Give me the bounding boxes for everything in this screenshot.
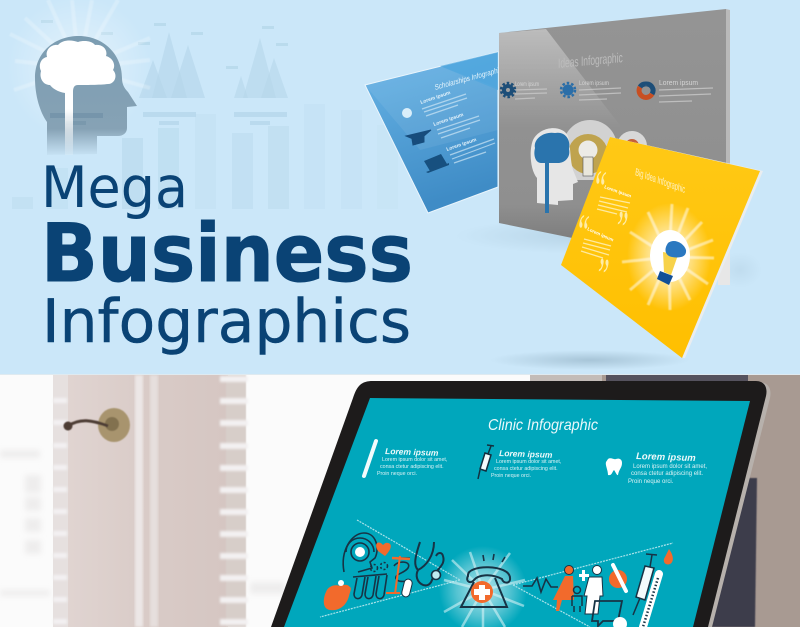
icon: glowing brain head bbox=[7, 0, 151, 155]
icon: speech bubble bbox=[592, 601, 622, 626]
clinic text: consa ctetur adipiscing elit. bbox=[380, 464, 444, 470]
laptop silver edge bbox=[362, 382, 770, 627]
icon: graduation cap bbox=[406, 130, 431, 145]
panel: big idea infographic: Lorem ipsum bbox=[587, 226, 614, 242]
icons: right medical cluster bbox=[523, 549, 673, 627]
clinic text: Lorem ipsum dolor sit amet, bbox=[496, 459, 561, 465]
clinic text: Proin neque orci. bbox=[377, 471, 417, 477]
icon: star cross bbox=[579, 570, 589, 581]
figure: woman bbox=[564, 566, 574, 574]
quote marks: “ bbox=[573, 202, 592, 262]
panel: ideas infographic: Ideas Infographic bbox=[558, 50, 623, 71]
icon: heart bbox=[376, 543, 391, 556]
title line: Business: Business bbox=[41, 207, 413, 300]
clinic text: Lorem ipsum bbox=[499, 448, 553, 460]
icon: thermometer bbox=[364, 441, 376, 476]
icon: donut chart bbox=[639, 84, 653, 97]
icon: gear blue bbox=[561, 83, 575, 97]
panel: scholarships infographic: Scholarships Infographic bbox=[434, 65, 502, 92]
icon: tooth bbox=[606, 458, 622, 475]
screen title: Clinic Infographic bbox=[488, 417, 598, 434]
icon: gear dark bbox=[501, 83, 515, 97]
clinic text: Lorem ipsum dolor sit amet, bbox=[382, 457, 447, 463]
floor shadows bbox=[455, 218, 762, 370]
icon: thermometer large bbox=[643, 574, 659, 627]
clinic text bbox=[377, 446, 707, 485]
panel: scholarships infographic: Lorem ipsum bbox=[433, 112, 465, 128]
panel: scholarships infographic: Lorem ipsum bbox=[446, 137, 478, 153]
quote marks: ” bbox=[593, 246, 612, 306]
clinic text: Lorem ipsum bbox=[385, 446, 439, 458]
panel: ideas infographic: Lorem ipsum bbox=[579, 80, 609, 87]
icon: telephone with cross and rays bbox=[439, 546, 527, 627]
laptop screen bbox=[284, 398, 750, 627]
icon: apple bbox=[324, 580, 351, 610]
window blinds bbox=[53, 376, 248, 625]
icon: orange drop bbox=[664, 549, 673, 564]
panel: scholarships infographic bbox=[365, 52, 502, 213]
panel: ideas infographic: Lorem ipsum bbox=[659, 78, 698, 87]
title line: Mega: Mega bbox=[41, 155, 188, 221]
panel: ideas infographic: Lorem ipsum bbox=[515, 81, 539, 88]
icon: syringe large bbox=[633, 554, 657, 615]
icon: radiant light bulb bbox=[622, 203, 714, 311]
panel: big idea infographic: Lorem ipsum bbox=[604, 184, 632, 199]
panel: stand leg bbox=[718, 240, 730, 285]
white highlight seam between sections bbox=[0, 374, 800, 375]
icons: left medical cluster bbox=[343, 533, 444, 599]
clinic text: Lorem ipsum dolor sit amet, bbox=[633, 464, 707, 470]
clinic text: consa ctetur adipiscing elit. bbox=[631, 471, 703, 477]
panel: big idea infographic: Big Idea Infographic bbox=[635, 167, 686, 196]
icon: bone with orange spot bbox=[609, 570, 627, 588]
figure: man bbox=[584, 566, 603, 614]
clinic text: consa ctetur adipiscing elit. bbox=[494, 466, 558, 472]
laptop bezel bbox=[271, 381, 767, 627]
wall right of laptop bbox=[530, 375, 800, 627]
dotted beams bbox=[320, 520, 673, 627]
door handle bbox=[64, 408, 130, 442]
faint chart backdrop bbox=[12, 20, 398, 209]
panel: ideas infographic bbox=[499, 9, 730, 285]
laptop bbox=[271, 381, 770, 627]
clinic text: Proin neque orci. bbox=[628, 479, 674, 485]
clinic text: Lorem ipsum bbox=[636, 451, 696, 464]
quote marks bbox=[573, 158, 631, 306]
figure: child bbox=[572, 586, 582, 612]
photo backdrop: window and door frame bbox=[0, 375, 800, 627]
quote marks: “ bbox=[590, 158, 609, 218]
icon: syringe bbox=[478, 445, 494, 479]
quote marks: ” bbox=[612, 199, 631, 259]
icon: globe bbox=[402, 108, 412, 118]
panel: big idea infographic bbox=[561, 137, 763, 358]
icon: tooth small bbox=[613, 617, 627, 627]
panel: scholarships infographic: Lorem ipsum bbox=[420, 90, 452, 106]
icon: head and light bulb group bbox=[531, 120, 647, 213]
title line: Infographics: Infographics bbox=[42, 287, 411, 357]
title bbox=[41, 155, 413, 357]
sky blue background bbox=[0, 0, 800, 375]
icon: laptop bbox=[424, 154, 449, 173]
clinic text: Proin neque orci. bbox=[491, 473, 531, 479]
